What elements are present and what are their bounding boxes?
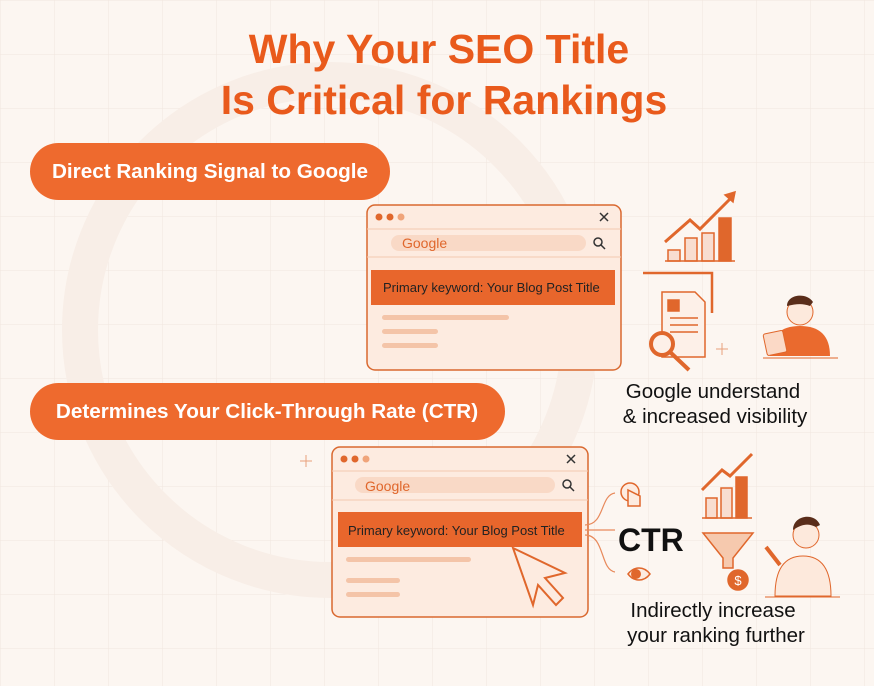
icon: person with tablet 1 [763,296,838,358]
browser 2: Google [365,478,410,494]
icon: document magnifier [651,292,705,370]
browser 2 [332,447,588,617]
browser 1 [367,205,621,370]
CTR label: CTR [618,522,684,558]
caption 1: Google understand [626,380,800,403]
pill: direct ranking signal: Direct Ranking Signal to Google [52,160,368,183]
icon: click hand [621,483,640,506]
title [221,26,667,123]
icon: person pointing [765,517,840,597]
arrows to CTR [585,493,615,572]
title: Why Your SEO Title [249,26,629,72]
pill: CTR [30,383,505,440]
caption 1 [623,380,808,428]
icon: eye [628,568,650,580]
icon: funnel: $ [734,573,742,588]
icon: growth chart 2 [702,454,752,518]
icon: funnel [703,533,753,590]
caption 2: your ranking further [627,624,805,647]
decorative plus [300,343,728,467]
icon: cursor [513,548,565,605]
pill: direct ranking signal [30,143,390,200]
caption 2 [627,599,805,647]
icon: growth chart 1 [643,192,735,313]
caption 1: & increased visibility [623,405,808,428]
browser 2: Primary keyword: Your Blog Post Title [348,523,565,538]
title: Is Critical for Rankings [221,77,667,123]
pill: CTR: Determines Your Click-Through Rate (CTR) [56,400,478,423]
caption 2: Indirectly increase [630,599,796,622]
browser 1: Primary keyword: Your Blog Post Title [383,280,600,295]
browser 1: Google [402,235,447,251]
